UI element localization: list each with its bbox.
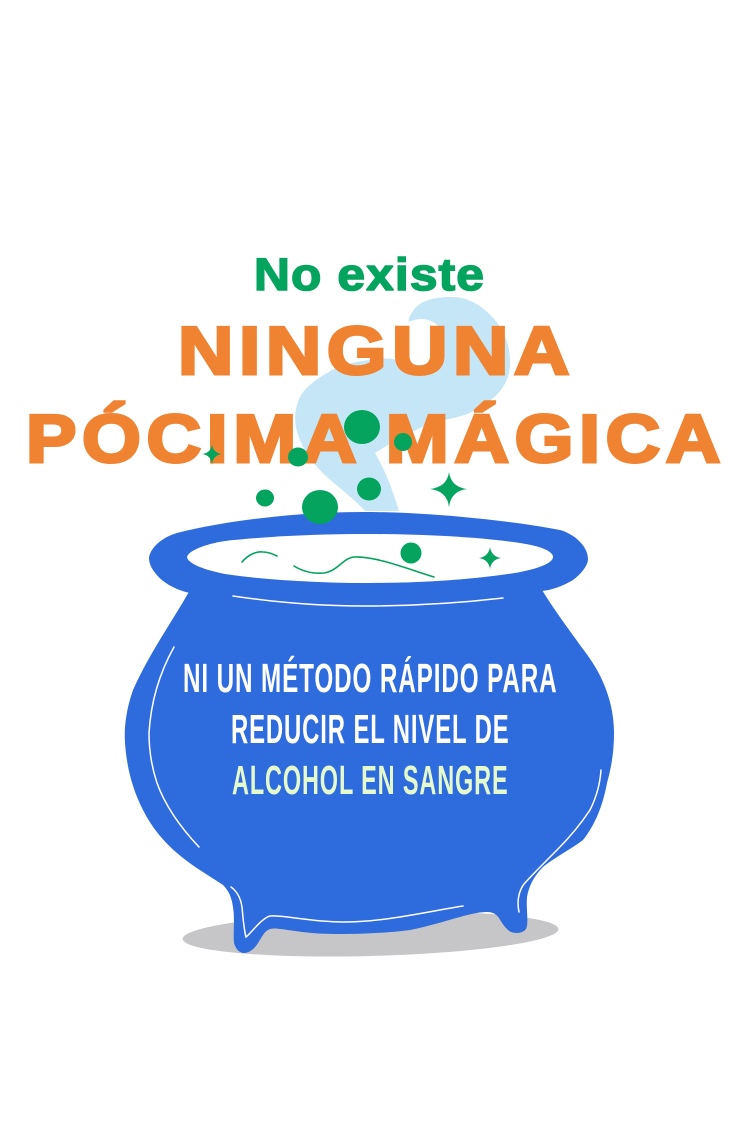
shadow: [182, 907, 559, 961]
white highlight lines: [149, 596, 601, 937]
cauldron rim: [149, 512, 588, 604]
potion bubble: [400, 542, 422, 564]
cauldron body: [125, 590, 614, 953]
cauldron opening: [187, 534, 553, 583]
potion swirl lines: [242, 552, 434, 577]
floating bubbles and sparkles: [202, 410, 467, 524]
potion sparkle: [479, 547, 501, 569]
steam: [295, 297, 510, 511]
text line 2: REDUCIR EL NIVEL DE: [231, 706, 510, 752]
heading: NINGUNA: NINGUNA: [178, 313, 575, 389]
cauldron: [125, 512, 614, 953]
text line 3: ALCOHOL EN SANGRE: [232, 757, 508, 803]
cauldron text: [183, 655, 558, 803]
heading: PÓCIMA MÁGICA: PÓCIMA MÁGICA: [26, 401, 726, 477]
heading: No existe: No existe: [254, 249, 485, 300]
